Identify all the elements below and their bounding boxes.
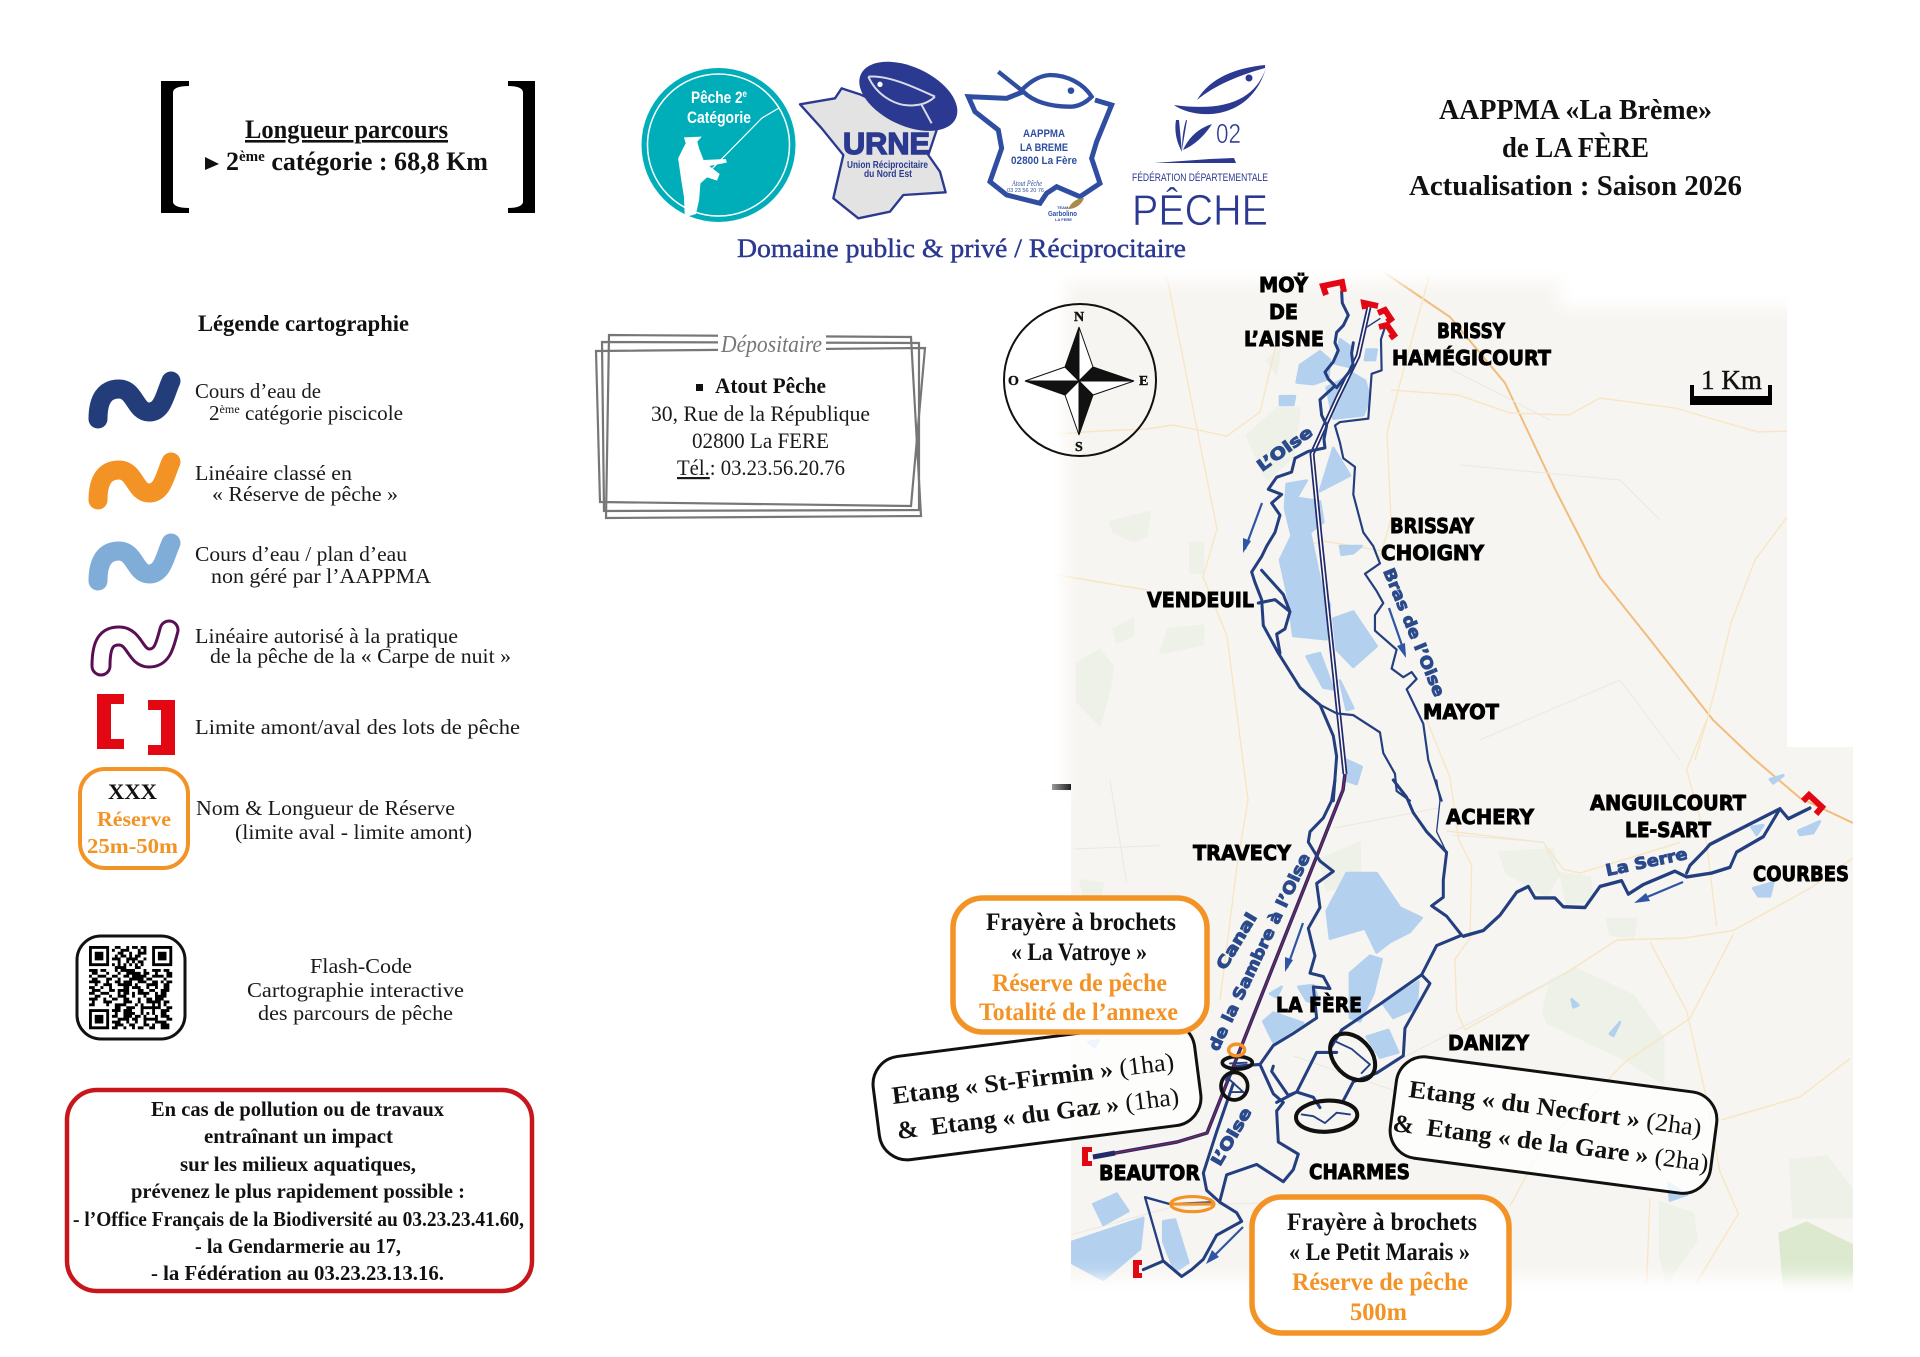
- QR code: [77, 936, 185, 1039]
- logo: URNE: du Nord Est: [864, 169, 913, 180]
- small dark gradient mark: [1052, 784, 1071, 790]
- text: flash code: Flash-Code: [310, 954, 412, 978]
- reserve marker: Vatroye: [1229, 1044, 1245, 1056]
- icon: orange wave: [98, 462, 171, 500]
- logos row: [642, 48, 1268, 263]
- callout: etangs Necfort and Gare: & Etang « de la Gare » (2ha): [1391, 1110, 1710, 1177]
- text: night carp: [195, 624, 511, 668]
- panel: depositary: [596, 325, 925, 518]
- ring: Gare: [1295, 1099, 1358, 1133]
- rivers: canal and Oise network: [1093, 292, 1810, 1277]
- icon: light blue wave: [98, 543, 171, 581]
- ring: Necfort: [1321, 1024, 1384, 1089]
- river: upper Oise: [1252, 292, 1442, 801]
- river labels: L’Oise: [1207, 1104, 1256, 1169]
- callout: frayere Le Petit Marais: Frayère à brochets: [1287, 1209, 1477, 1236]
- logo: AAPPMA La Breme: LA BREME: [1020, 142, 1068, 154]
- title: Actualisation : Saison 2026: [1409, 170, 1742, 202]
- panel: pollution warning: - la Fédération au 03.23.23.13.16.: [151, 1261, 444, 1285]
- town labels: L’AISNE: [1244, 327, 1324, 351]
- roads: [1057, 273, 1853, 1283]
- town labels: HAMÉGICOURT: [1392, 346, 1551, 370]
- title: [1409, 94, 1742, 202]
- text: reserve name: (limite aval - limite amont): [235, 820, 472, 844]
- town labels: DANIZY: [1448, 1031, 1529, 1055]
- compass rose: E: [1139, 374, 1148, 389]
- town labels: ACHERY: [1446, 805, 1534, 829]
- town labels: COURBES: [1753, 862, 1849, 886]
- text: reserve: Linéaire classé en: [195, 461, 353, 485]
- subtitle: domain: Domaine public & privé / Réciprocitaire: [737, 234, 1186, 263]
- text: flash code: des parcours de pêche: [258, 1001, 453, 1025]
- lakes: [1072, 339, 1820, 1280]
- logo: AAPPMA La Breme: [968, 72, 1112, 222]
- scale bar: 1 km: [1690, 365, 1772, 405]
- river labels: [1204, 422, 1689, 1169]
- text: second category: [195, 379, 403, 425]
- logo: AAPPMA La Breme: AAPPMA: [1023, 128, 1065, 140]
- title: de LA FÈRE: [1502, 131, 1649, 164]
- map base: [1030, 260, 1870, 1300]
- text: second category: ème: [220, 402, 240, 416]
- logo: federation de peche 02: 02: [1216, 118, 1241, 149]
- callout: frayere La Vatroye: Réserve de pêche: [992, 970, 1167, 997]
- panel: depositary: 02800 La FERE: [692, 428, 829, 453]
- town labels: LE-SART: [1625, 818, 1711, 842]
- text: night carp: Linéaire autorisé à la pratique: [195, 624, 458, 648]
- callout: etangs St-Firmin and du Gaz: & Etang « du Gaz » (1ha): [895, 1084, 1181, 1145]
- logo: AAPPMA La Breme: TEAM: [1057, 205, 1069, 210]
- town labels: CHARMES: [1309, 1160, 1410, 1184]
- panel: pollution warning: En cas de pollution ou de travaux: [151, 1097, 444, 1121]
- text: reserve: « Réserve de pêche »: [212, 482, 398, 506]
- text: flash code: Cartographie interactive: [247, 978, 464, 1002]
- panel: depositary: Tél.: 03.23.56.20.76: [677, 455, 845, 480]
- town labels: BRISSAY: [1390, 514, 1474, 538]
- length value: ème: [239, 149, 265, 165]
- flow arrows: [1206, 503, 1683, 1264]
- river labels: Bras de l’Oise: [1379, 565, 1449, 699]
- title: AAPPMA «La Brème»: [1439, 94, 1712, 126]
- text: not managed: non géré par l’AAPPMA: [211, 564, 432, 588]
- icon: purple outline wave: [101, 630, 169, 666]
- logo: peche 2e categorie: Catégorie: [687, 108, 751, 127]
- panel: depositary: Atout Pêche: [715, 373, 826, 398]
- callout: etangs Necfort and Gare: Etang « du Necfort » (2ha): [1407, 1076, 1703, 1142]
- panel: pollution warning: - la Gendarmerie au 17,: [195, 1234, 401, 1258]
- river labels: La Serre: [1604, 844, 1689, 880]
- callout: frayere Le Petit Marais: « Le Petit Marais »: [1289, 1239, 1470, 1266]
- panel: pollution warning: sur les milieux aquatiques,: [180, 1152, 416, 1176]
- logo: federation de peche 02: FÉDÉRATION DÉPARTEMENTALE: [1132, 171, 1268, 184]
- logo: federation de peche 02: [1132, 65, 1268, 235]
- length box: brackets and course length: [161, 81, 535, 213]
- panel: depositary: 30, Rue de la République: [651, 401, 870, 426]
- text: reserve name: [196, 796, 472, 844]
- town labels: LA FÈRE: [1276, 993, 1362, 1017]
- compass rose: S: [1075, 440, 1083, 455]
- triangle bullet: [205, 157, 219, 170]
- town labels: TRAVECY: [1193, 841, 1291, 865]
- icon: red limit brackets: [97, 694, 175, 755]
- length value: catégorie : 68,8 Km: [265, 147, 488, 176]
- legend heading: Légende cartographie: [198, 311, 409, 336]
- reserve marker: Petit Marais: [1171, 1197, 1214, 1212]
- logo: federation de peche 02: PÊCHE: [1132, 186, 1268, 235]
- text: second category: Cours d’eau de: [195, 379, 321, 403]
- compass rose: [1004, 304, 1156, 456]
- pond rings and reserve markers: [1171, 1024, 1384, 1212]
- town labels: MAYOT: [1423, 700, 1499, 724]
- callout: etangs St-Firmin and du Gaz: Etang « St-Firmin » (1ha): [890, 1049, 1176, 1110]
- length heading: Longueur parcours: [245, 115, 448, 144]
- text: flash code: [247, 954, 464, 1025]
- callout: frayere La Vatroye: [953, 898, 1207, 1032]
- text: not managed: [195, 542, 432, 588]
- scale bar: 1 km: 1 Km: [1701, 365, 1762, 395]
- text: second category: 2: [209, 401, 220, 425]
- icon: dark blue wave: [98, 381, 171, 419]
- river: lower Oise: [1143, 780, 1462, 1277]
- length value: 2: [226, 147, 239, 176]
- canal de la Sambre a l'Oise: [1093, 307, 1369, 1157]
- callout: frayere Le Petit Marais: [1252, 1197, 1509, 1333]
- text: not managed: Cours d’eau / plan d’eau: [195, 542, 408, 566]
- panel: pollution warning: prévenez le plus rapidement possible :: [131, 1179, 465, 1203]
- text: reserve name: Nom & Longueur de Réserve: [196, 796, 455, 820]
- panel: pollution warning: [67, 1090, 532, 1291]
- text: limits: Limite amont/aval des lots de pêche: [195, 715, 520, 739]
- text: second category: catégorie piscicole: [240, 401, 403, 425]
- logo: peche 2e categorie: Pêche 2: [691, 88, 755, 107]
- logo: AAPPMA La Breme: 02800 La Fère: [1011, 155, 1077, 167]
- compass rose: O: [1008, 374, 1019, 389]
- town labels: BRISSY: [1437, 319, 1505, 343]
- logo: AAPPMA La Breme: LA FERE: [1055, 217, 1072, 222]
- town labels: [1099, 273, 1849, 1185]
- ring: du Gaz: [1221, 1072, 1248, 1100]
- callout: etangs St-Firmin and du Gaz: [870, 1019, 1204, 1163]
- town labels: BEAUTOR: [1099, 1161, 1200, 1185]
- callout: etangs Necfort and Gare: [1387, 1053, 1720, 1197]
- text: reserve: [195, 461, 398, 506]
- town labels: CHOIGNY: [1381, 541, 1485, 565]
- logo: URNE: URNE: [843, 126, 930, 161]
- panel: pollution warning: entraînant un impact: [204, 1124, 393, 1148]
- river labels: de la Sambre à l’Oise: [1204, 850, 1314, 1054]
- logo: peche 2e categorie: e: [743, 89, 747, 100]
- callout: frayere Le Petit Marais: Réserve de pêche: [1292, 1269, 1468, 1296]
- river labels: L’Oise: [1253, 422, 1316, 475]
- text: night carp: de la pêche de la « Carpe de nuit »: [210, 644, 511, 668]
- logo: peche 2e categorie: [642, 68, 796, 222]
- legend panel: [80, 311, 520, 868]
- logo: AAPPMA La Breme: Atout Pêche: [1011, 179, 1042, 188]
- town labels: VENDEUIL: [1147, 588, 1254, 612]
- reserve sample box: 25m-50m: [87, 834, 179, 858]
- green areas: [1077, 350, 1853, 1294]
- compass rose: N: [1074, 310, 1084, 325]
- town labels: ANGUILCOURT: [1590, 791, 1746, 815]
- callout: frayere La Vatroye: Frayère à brochets: [986, 909, 1176, 936]
- callout: frayere La Vatroye: Totalité de l’annexe: [979, 999, 1178, 1026]
- red limit markers: [1082, 282, 1822, 1278]
- reserve sample box: XXX: [108, 779, 157, 804]
- town labels: MOŸ: [1259, 273, 1308, 297]
- logo: AAPPMA La Breme: Garbolino: [1048, 211, 1077, 218]
- river labels: Canal: [1212, 909, 1261, 973]
- river: La Serre: [1463, 808, 1810, 936]
- logo: URNE: [800, 48, 968, 218]
- town labels: DE: [1269, 300, 1298, 324]
- ring: St-Firmin: [1222, 1057, 1252, 1069]
- callout: frayere Le Petit Marais: 500m: [1350, 1299, 1407, 1326]
- reserve sample box: Réserve: [97, 807, 171, 831]
- logo: AAPPMA La Breme: 03 23 56 20 76: [1007, 188, 1044, 194]
- panel: depositary: Dépositaire: [720, 332, 822, 358]
- logo: URNE: Union Réciprocitaire: [847, 160, 928, 171]
- right bracket: [508, 81, 535, 213]
- panel: pollution warning: - l’Office Français de la Biodiversité au 03.23.23.41.60,: [73, 1207, 524, 1231]
- left bracket: [161, 81, 189, 213]
- reserve sample box: [80, 769, 188, 868]
- callout: frayere La Vatroye: « La Vatroye »: [1011, 939, 1147, 966]
